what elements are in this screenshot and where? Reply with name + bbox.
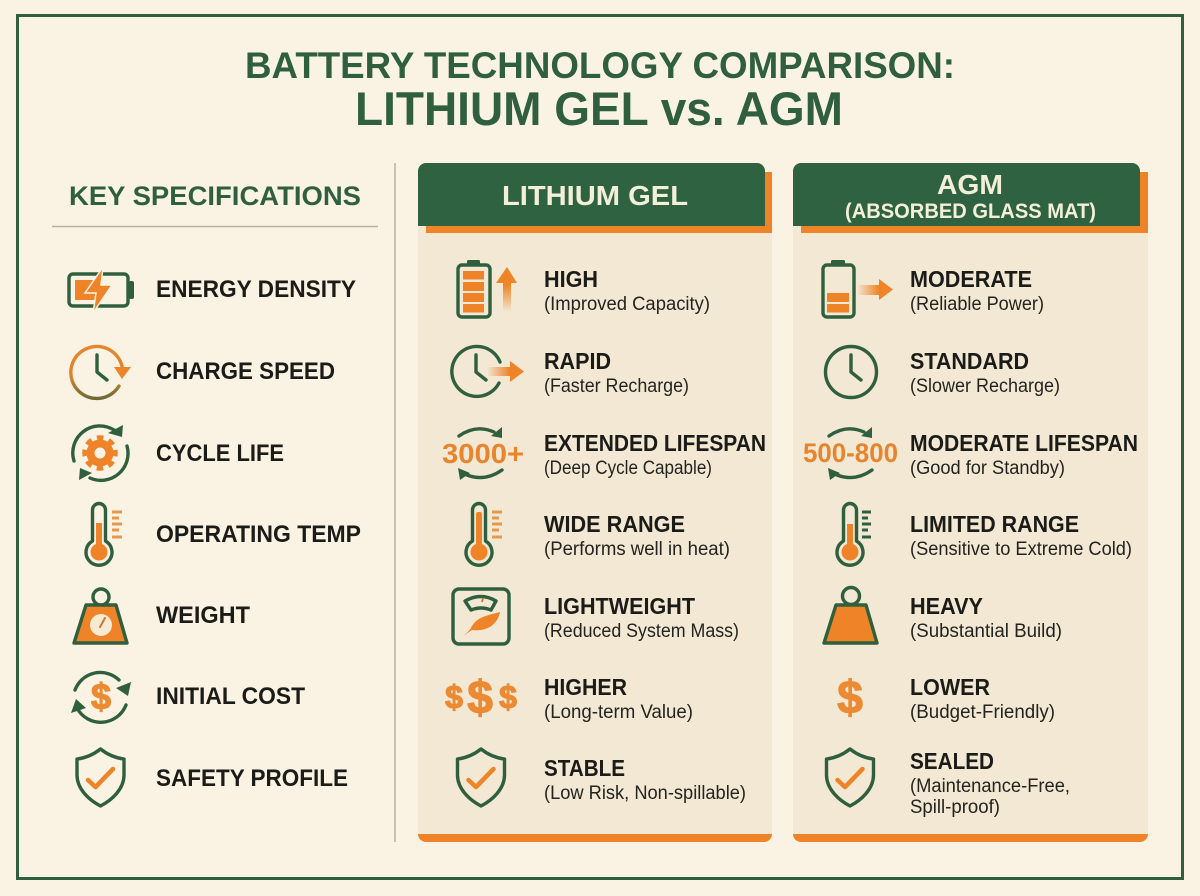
text: moderate: MODERATE [910, 266, 1032, 292]
icon: rapid clock [452, 346, 524, 396]
text: extended lifespan: (Deep Cycle Capable) [544, 458, 712, 479]
icon: safety shield [77, 749, 124, 806]
icon: stable shield [458, 749, 504, 806]
icon: higher cost dollars: $ [445, 679, 463, 715]
text: rapid: RAPID [544, 348, 611, 374]
text: heavy: HEAVY [910, 593, 983, 619]
icon: standard clock [826, 346, 876, 398]
text: lower [910, 674, 1055, 723]
icon: wide range thermometer [466, 504, 502, 565]
label: energy density: ENERGY DENSITY [156, 276, 356, 303]
label: cycle life: CYCLE LIFE [156, 440, 284, 467]
text: sealed: Spill-proof) [910, 797, 1000, 818]
text: high [544, 266, 710, 315]
icon: higher cost dollars: $ [467, 671, 493, 723]
text: moderate: (Reliable Power) [910, 294, 1044, 315]
icon: operating temp thermometer [86, 504, 122, 565]
text: higher: (Long-term Value) [544, 702, 693, 723]
label: safety profile: SAFETY PROFILE [156, 765, 348, 792]
icon: 500-800 cycles [803, 427, 898, 480]
icon: limited range thermometer [837, 504, 871, 565]
icon: 3000+ cycles: 3000+ [442, 438, 524, 469]
text: high: HIGH [544, 266, 598, 292]
label: weight: WEIGHT [156, 602, 250, 629]
text: rapid: (Faster Recharge) [544, 376, 689, 397]
text: limited range [910, 511, 1132, 560]
header: agm [793, 163, 1148, 233]
icon: sealed shield [826, 749, 874, 806]
panel: agm [793, 163, 1148, 842]
icon: weight [74, 589, 127, 643]
text: higher: HIGHER [544, 674, 627, 700]
icon: 500-800 cycles: 500-800 [803, 438, 898, 468]
icon: high capacity battery [458, 260, 517, 317]
text: lightweight [544, 593, 739, 642]
text: lightweight: LIGHTWEIGHT [544, 593, 695, 619]
icon: cycle life gear [73, 425, 128, 480]
text: heavy [910, 593, 1062, 642]
text: stable [544, 755, 746, 804]
header: agm: (ABSORBED GLASS MAT) [845, 200, 1096, 223]
icon: heavy weight [824, 588, 877, 643]
label: charge speed: CHARGE SPEED [156, 358, 335, 385]
icon: initial cost: $ [91, 676, 111, 717]
text: standard: (Slower Recharge) [910, 376, 1060, 397]
panel: key specifications [52, 181, 378, 806]
icon: lower cost dollar: $ [837, 671, 863, 723]
text: extended lifespan: EXTENDED LIFESPAN [544, 430, 766, 456]
text: standard: STANDARD [910, 348, 1029, 374]
icon: 3000+ cycles [442, 427, 524, 480]
icon: energy density battery [69, 267, 134, 313]
text: stable: STABLE [544, 755, 625, 781]
text: high: (Improved Capacity) [544, 294, 710, 315]
panel: lithium gel [418, 163, 772, 842]
header: lithium gel: LITHIUM GEL [502, 180, 688, 211]
title: BATTERY TECHNOLOGY COMPARISON: [245, 45, 955, 86]
text: moderate lifespan: MODERATE LIFESPAN [910, 430, 1138, 456]
icon: lightweight scale [453, 589, 509, 644]
text: wide range: WIDE RANGE [544, 511, 685, 537]
text: higher [544, 674, 693, 723]
text: lower: LOWER [910, 674, 990, 700]
text: sealed: SEALED [910, 748, 994, 774]
label: operating temp: OPERATING TEMP [156, 521, 361, 548]
text: lightweight: (Reduced System Mass) [544, 621, 739, 642]
text: sealed: (Maintenance-Free, [910, 776, 1070, 797]
text: stable: (Low Risk, Non-spillable) [544, 783, 746, 804]
heading: key specifications: KEY SPECIFICATIONS [69, 181, 361, 211]
label: initial cost: INITIAL COST [156, 683, 305, 710]
text: moderate [910, 266, 1044, 315]
text: extended lifespan [544, 430, 766, 479]
text: heavy: (Substantial Build) [910, 621, 1062, 642]
text: wide range [544, 511, 730, 560]
text: lower: (Budget-Friendly) [910, 702, 1055, 723]
title: LITHIUM GEL vs. AGM [355, 82, 843, 135]
icon: moderate battery [823, 260, 893, 317]
header: lithium gel [418, 163, 772, 233]
text: wide range: (Performs well in heat) [544, 539, 730, 560]
text: standard [910, 348, 1060, 397]
text: limited range: (Sensitive to Extreme Cold) [910, 539, 1132, 560]
icon: higher cost dollars [445, 671, 517, 723]
text: moderate lifespan [910, 430, 1138, 479]
text: sealed [910, 748, 1070, 818]
title [245, 45, 955, 135]
header: agm: AGM [937, 169, 1003, 200]
icon: charge speed clock [71, 346, 131, 398]
text: limited range: LIMITED RANGE [910, 511, 1079, 537]
icon: higher cost dollars: $ [499, 679, 517, 715]
icon: initial cost [71, 672, 131, 722]
text: rapid [544, 348, 689, 397]
text: moderate lifespan: (Good for Standby) [910, 458, 1065, 479]
